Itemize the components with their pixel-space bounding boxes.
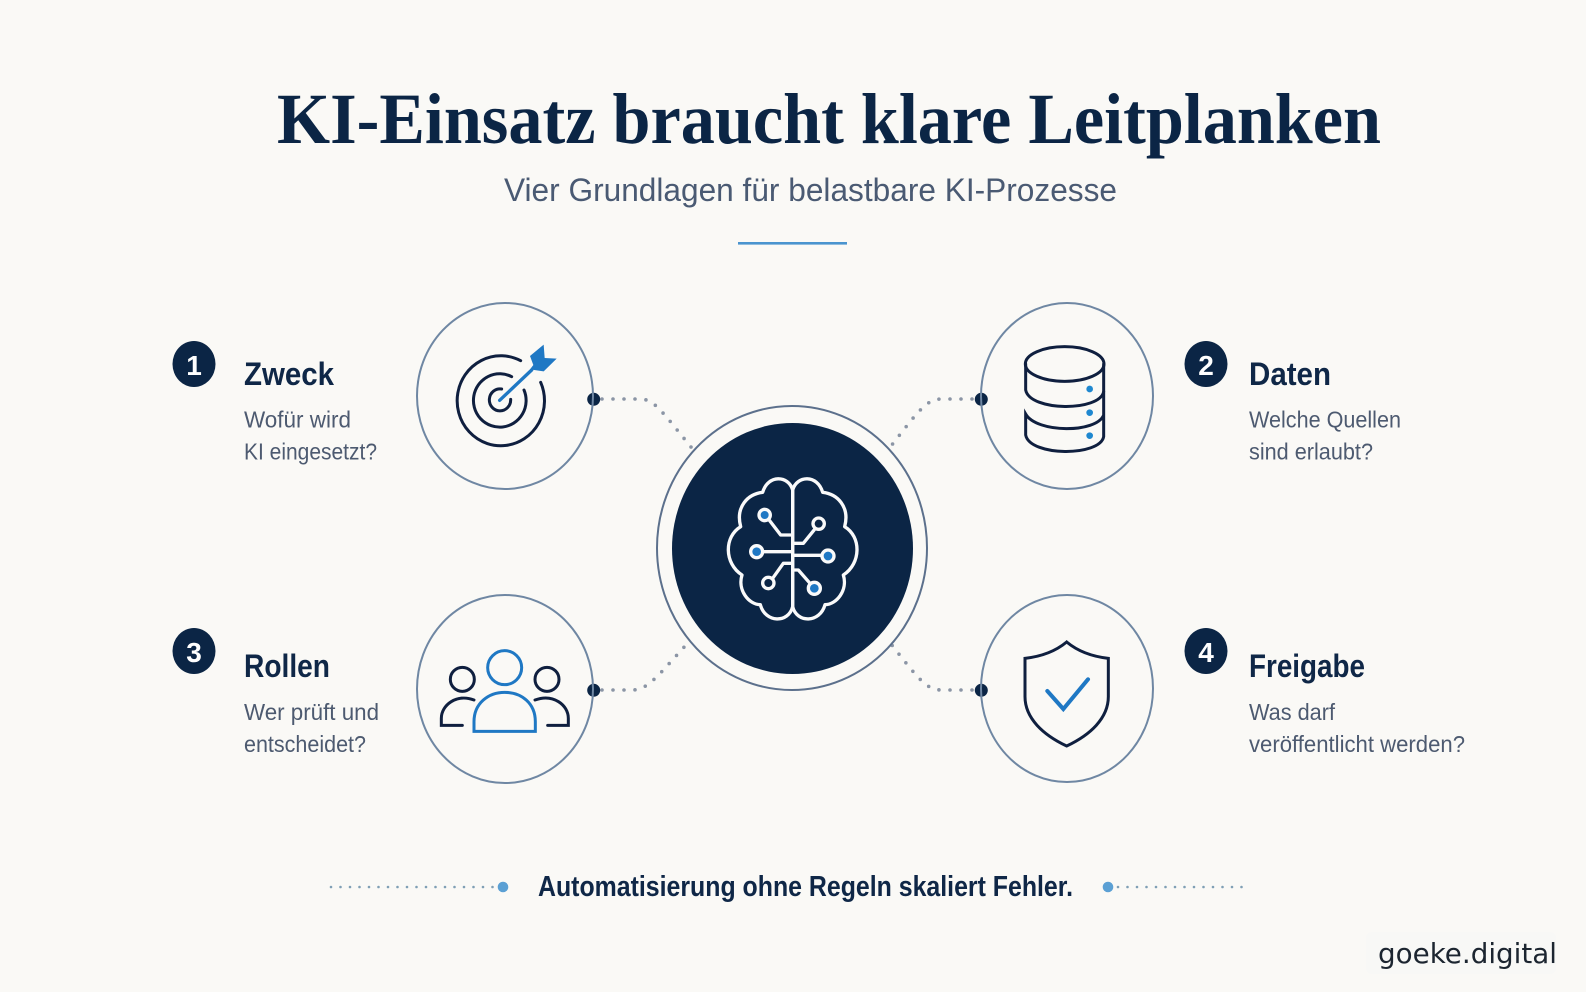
heading Zweck: Zweck — [244, 356, 334, 392]
badge 3: 3 — [186, 637, 202, 668]
panel: Zweck — [172, 303, 593, 489]
icon: database — [981, 303, 1153, 489]
text Zweck: KI eingesetzt? — [244, 438, 377, 464]
panel: Freigabe — [981, 595, 1465, 782]
heading Freigabe: Freigabe — [1249, 648, 1365, 684]
heading Daten: Daten — [1249, 356, 1331, 392]
watermark: goeke.digital — [1378, 938, 1557, 970]
footer message — [331, 871, 1246, 903]
footer message: Automatisierung ohne Regeln skaliert Fehler. — [538, 871, 1073, 903]
icon: brain circuit — [728, 479, 857, 619]
text Daten: Welche Quellen — [1249, 406, 1401, 432]
panel: Rollen — [172, 595, 593, 783]
badge 1 — [172, 341, 216, 387]
text Zweck: Wofür wird — [244, 406, 351, 432]
badge 2 — [1184, 341, 1228, 387]
text Rollen — [244, 699, 379, 757]
panel: Daten — [981, 303, 1401, 489]
text Freigabe: veröffentlicht werden? — [1249, 731, 1465, 757]
connector: Rollen to centre — [587, 630, 700, 697]
title: KI-Einsatz braucht klare Leitplanken — [277, 79, 1381, 159]
central brain badge — [657, 406, 927, 690]
badge 3 — [172, 628, 216, 674]
text Zweck — [244, 406, 377, 464]
text Daten: sind erlaubt? — [1249, 438, 1373, 464]
badge 2: 2 — [1198, 350, 1214, 381]
title divider — [738, 242, 847, 245]
badge 4: 4 — [1198, 637, 1214, 668]
text Daten — [1249, 406, 1401, 464]
icon: people — [417, 595, 593, 783]
text Rollen: Wer prüft und — [244, 699, 379, 725]
icon: target — [417, 303, 593, 489]
connector: Zweck to centre — [587, 393, 700, 458]
connector: Daten to centre — [880, 393, 988, 460]
text Freigabe: Was darf — [1249, 699, 1336, 725]
text Rollen: entscheidet? — [244, 731, 366, 757]
connector: Freigabe to centre — [880, 630, 988, 697]
subtitle: Vier Grundlagen für belastbare KI-Prozesse — [504, 172, 1117, 208]
badge 1: 1 — [186, 350, 202, 381]
text Freigabe — [1249, 699, 1465, 757]
badge 4 — [1184, 628, 1228, 674]
heading Rollen: Rollen — [244, 648, 330, 684]
icon: shield — [981, 595, 1153, 782]
